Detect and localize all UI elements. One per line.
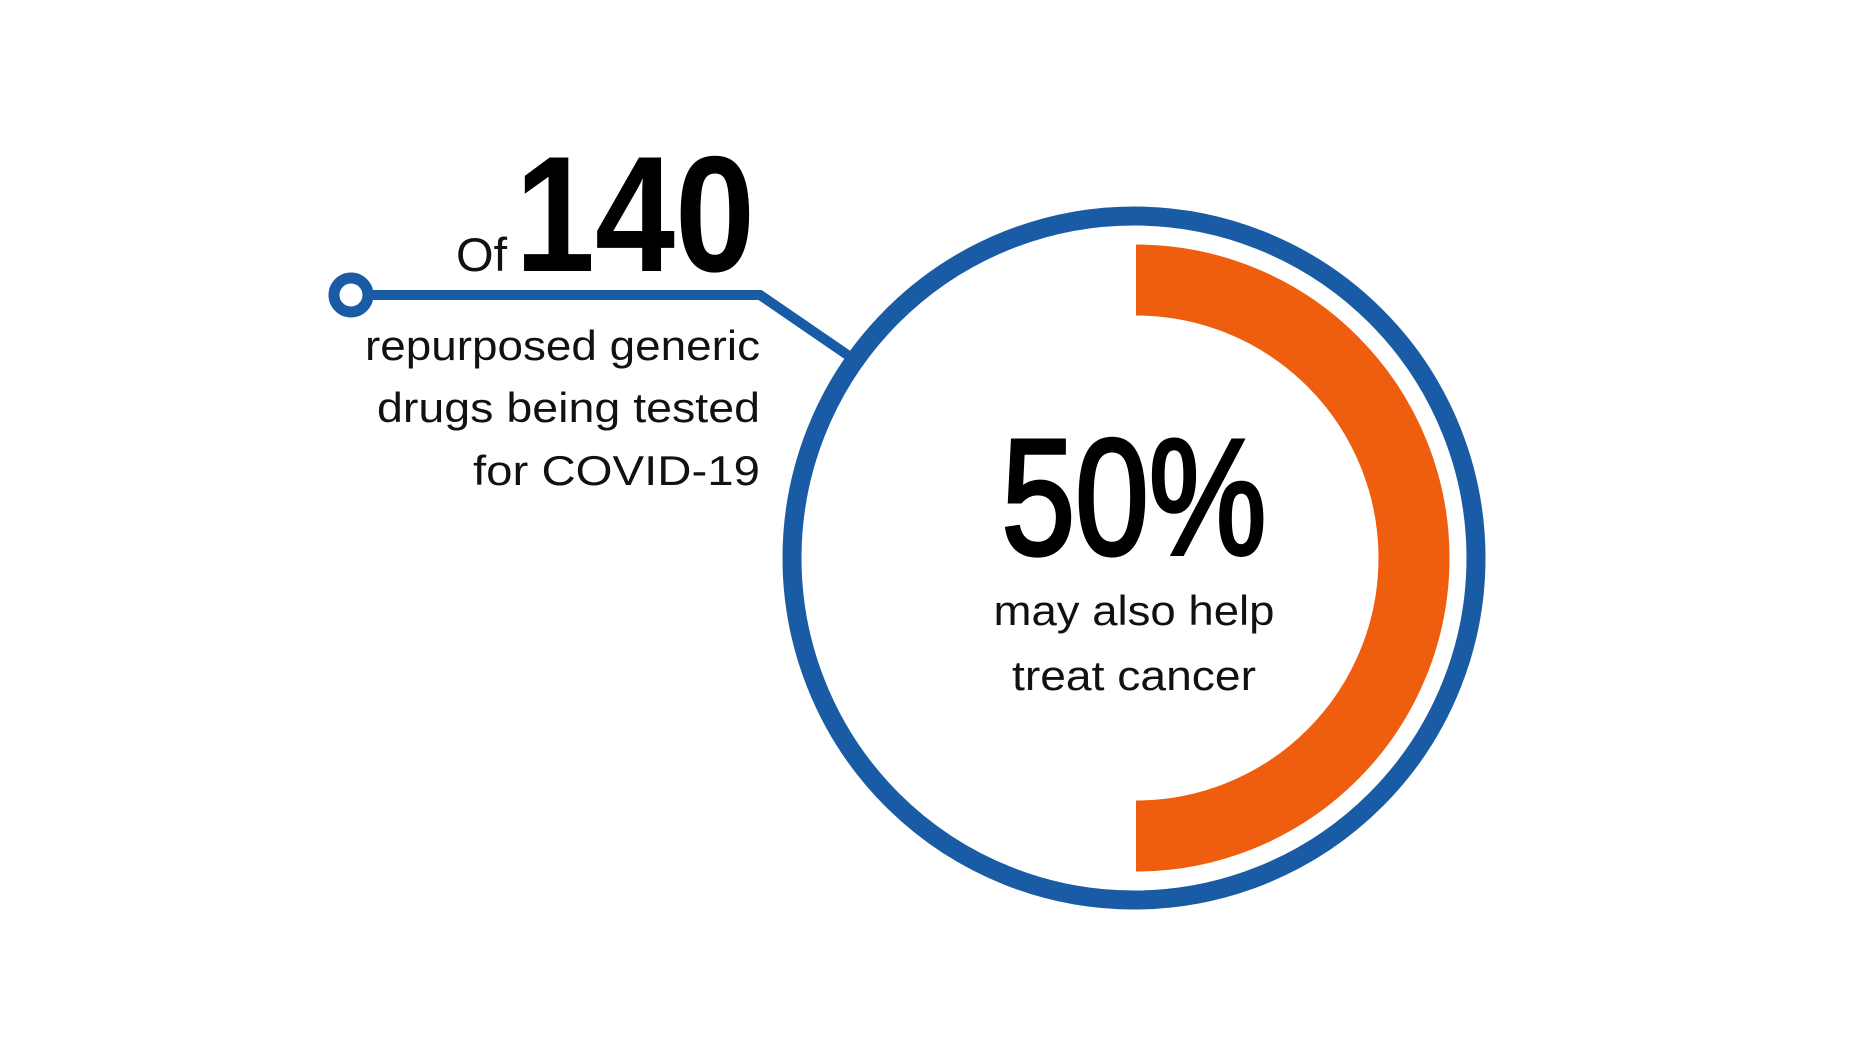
center stat: 50% [994, 405, 1274, 699]
text block: description: for COVID-19 [473, 447, 760, 494]
text block: description: repurposed generic [365, 322, 760, 369]
center stat: 50%: 50% [1002, 405, 1266, 589]
heading: Of 140: Of [456, 228, 508, 281]
connector line with dot [334, 278, 849, 356]
center stat: 50%: may also help [994, 587, 1274, 634]
orange progress arc 50% [1136, 280, 1414, 836]
text block: description: drugs being tested [377, 384, 760, 431]
blue ring [792, 216, 1476, 900]
center stat: 50%: treat cancer [1012, 652, 1256, 699]
heading: Of 140: 140 [515, 122, 755, 306]
text block: description [365, 322, 760, 494]
